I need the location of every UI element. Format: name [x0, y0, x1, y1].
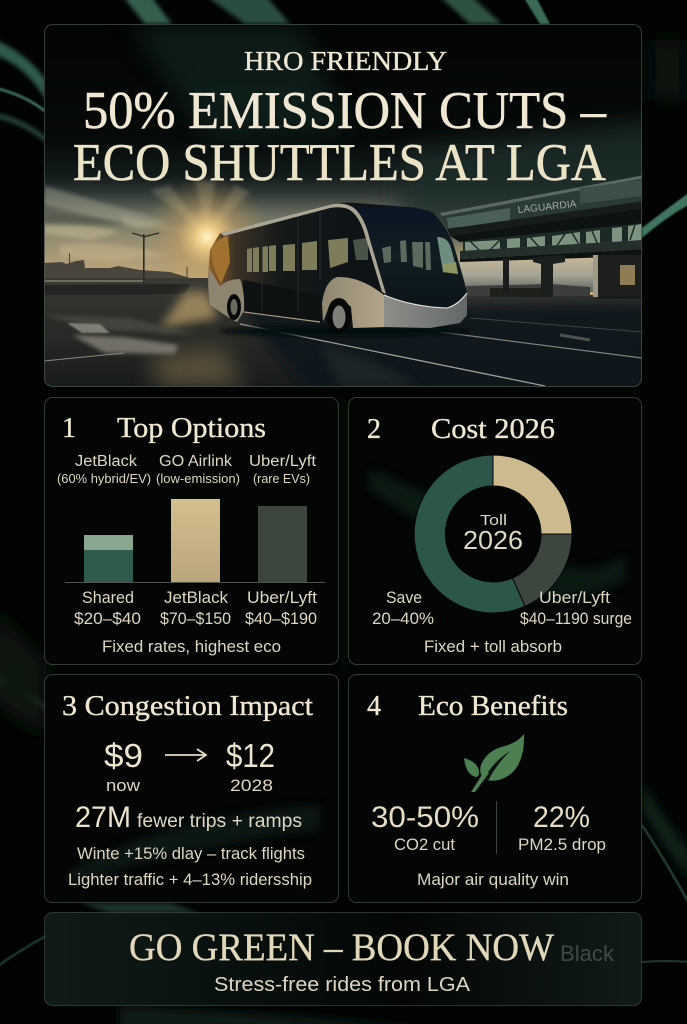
bus side windows: [247, 238, 348, 272]
option labels: (low-emission): [156, 471, 240, 486]
note lines: [68, 844, 312, 889]
bus rear panel: [208, 268, 244, 322]
toll 2028: $12: [226, 737, 275, 774]
heading: 2: [367, 414, 381, 445]
label: save: [372, 589, 434, 628]
heading: [62, 413, 266, 444]
panel: call to action: [44, 912, 642, 1006]
toll 2028: 2028: [230, 777, 273, 795]
stat: pm2.5 drop: PM2.5 drop: [518, 836, 606, 854]
icon: leaf: [464, 734, 524, 792]
price labels: $40–$190: [245, 610, 317, 628]
faint word: Black: [560, 941, 615, 966]
panel 1: top options: [44, 398, 338, 664]
stat: co2 cut: [371, 801, 479, 854]
stat: fewer trips: 27M: [75, 801, 131, 834]
hero title line 1: 50% EMISSION CUTS –: [83, 82, 606, 140]
label: save: Save: [386, 589, 422, 607]
stat: pm2.5 drop: [518, 801, 606, 854]
bus wheels: [327, 298, 351, 334]
heading: 1: [62, 413, 76, 444]
price labels: [74, 589, 317, 628]
price labels: JetBlack: [164, 589, 229, 607]
option labels: GO Airlink: [159, 453, 232, 470]
hero photo: wet ground: [44, 292, 650, 395]
bus windshield reflections: [382, 240, 431, 270]
bar chart: [65, 499, 325, 582]
stat: pm2.5 drop: 22%: [533, 801, 590, 834]
toll 2028: [226, 737, 275, 795]
hero photo: LaGuardia terminal bridge: [440, 175, 645, 299]
heading: 4: [367, 691, 381, 722]
toll now: [104, 737, 143, 795]
heading: 3 Congestion Impact: [62, 691, 313, 722]
heading: [367, 414, 555, 445]
caption: Fixed rates, highest eco: [102, 638, 281, 656]
label: uber/lyft: $40–1190 surge: [520, 610, 632, 628]
hero photo: sky: [44, 24, 660, 299]
cta subtitle: Stress-free rides from LGA: [214, 974, 471, 996]
option labels: (rare EVs): [253, 471, 310, 486]
hero title line 2: ECO SHUTTLES AT LGA: [73, 134, 606, 192]
note lines: Winte +15% dlay – track flights: [77, 844, 305, 863]
stat: fewer trips: [75, 801, 302, 834]
price labels: $70–$150: [160, 610, 231, 628]
label: uber/lyft: Uber/Lyft: [539, 589, 610, 607]
hero photo: electric shuttle bus: [208, 203, 470, 336]
cta heading: GO GREEN – BOOK NOW: [129, 926, 554, 969]
stat: co2 cut: 30-50%: [371, 801, 479, 834]
panel: hero: [44, 24, 660, 395]
stat: fewer trips: fewer trips + ramps: [137, 811, 302, 832]
option labels: (60% hybrid/EV): [57, 471, 151, 486]
option labels: [57, 453, 317, 486]
hero kicker: HRO FRIENDLY: [244, 46, 447, 76]
donut centre label: [463, 512, 523, 555]
arrow: [165, 749, 206, 761]
terminal sign: LAGUARDIA: [517, 199, 577, 216]
note lines: Lighter traffic + 4–13% ridersship: [68, 870, 312, 889]
price labels: Uber/Lyft: [247, 589, 317, 607]
donut centre label: 2026: [463, 525, 523, 555]
price labels: Shared: [82, 589, 134, 607]
donut chart: [414, 455, 572, 613]
bus nose: [384, 293, 467, 328]
panel 4: eco benefits: [348, 674, 642, 902]
stat: co2 cut: CO2 cut: [394, 836, 455, 854]
toll now: now: [106, 777, 140, 795]
option labels: JetBlack: [75, 453, 137, 470]
option labels: Uber/Lyft: [249, 453, 317, 470]
heading: Top Options: [117, 413, 266, 444]
label: save: 20–40%: [372, 610, 434, 628]
heading: Eco Benefits: [418, 691, 568, 722]
bus front side panel: [322, 277, 384, 328]
bus lower side panel: [243, 280, 282, 316]
price labels: $20–$40: [74, 610, 141, 628]
hero photo: horizon skyline and lamp post: [44, 233, 210, 296]
label: uber/lyft: [520, 589, 632, 628]
panel 2: cost 2026: [348, 398, 642, 664]
caption: Fixed + toll absorb: [424, 638, 562, 656]
panel 3: congestion impact: [44, 674, 338, 902]
toll now: $9: [104, 737, 143, 774]
heading: Cost 2026: [431, 414, 555, 445]
caption: Major air quality win: [417, 871, 569, 889]
donut centre label: Toll: [480, 512, 507, 529]
bus roof and pillar trim: [220, 204, 386, 294]
